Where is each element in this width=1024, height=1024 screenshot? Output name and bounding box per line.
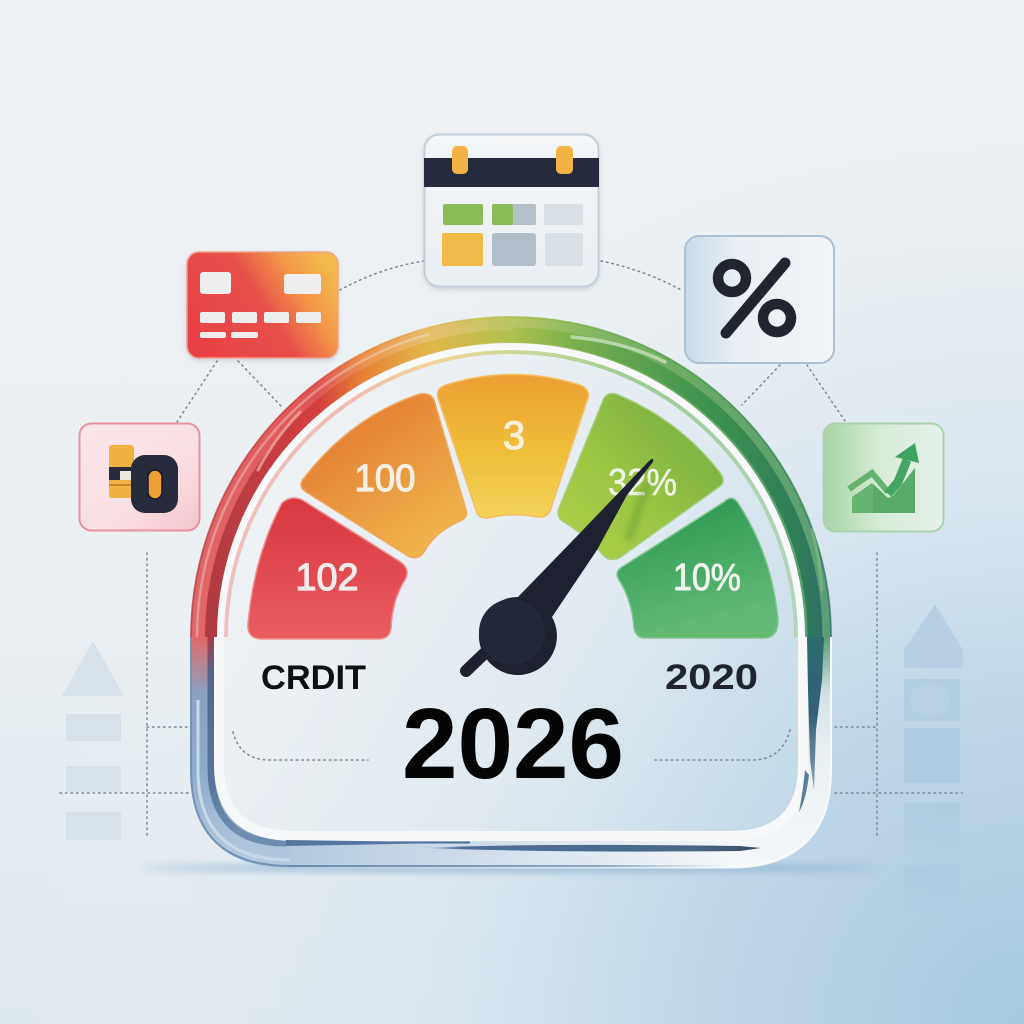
left decorative arrow stack — [62, 641, 124, 840]
icon: credit card — [187, 252, 338, 358]
segment: red: 102 — [296, 557, 358, 599]
icon: card and lock — [80, 424, 200, 530]
glass body — [224, 350, 798, 832]
segment: green — [617, 498, 778, 638]
segment: yellow — [438, 374, 588, 518]
needle — [466, 459, 653, 675]
dotted connector lines — [60, 261, 962, 837]
frame highlights — [258, 337, 824, 852]
icon: growth chart — [824, 424, 944, 532]
segment: light green: 32% — [608, 462, 677, 504]
gauge — [191, 317, 831, 866]
ground shadow — [140, 864, 880, 872]
right decorative arrow stack — [904, 604, 963, 910]
year: 2026: 2026 — [402, 688, 624, 800]
segment: orange: 100 — [354, 458, 416, 500]
segment: green: 10% — [673, 557, 741, 599]
icon: percent — [685, 236, 834, 363]
icon: calendar — [424, 134, 599, 286]
segment: red — [248, 498, 407, 639]
segment: light green — [558, 394, 723, 560]
inner dotted guides — [233, 730, 790, 760]
label: CRDIT: CRDIT — [261, 659, 366, 697]
label: 2020: 2020 — [665, 658, 758, 697]
segment: orange — [301, 394, 466, 558]
gauge frame — [191, 317, 831, 866]
segment: yellow: 3 — [503, 414, 525, 458]
